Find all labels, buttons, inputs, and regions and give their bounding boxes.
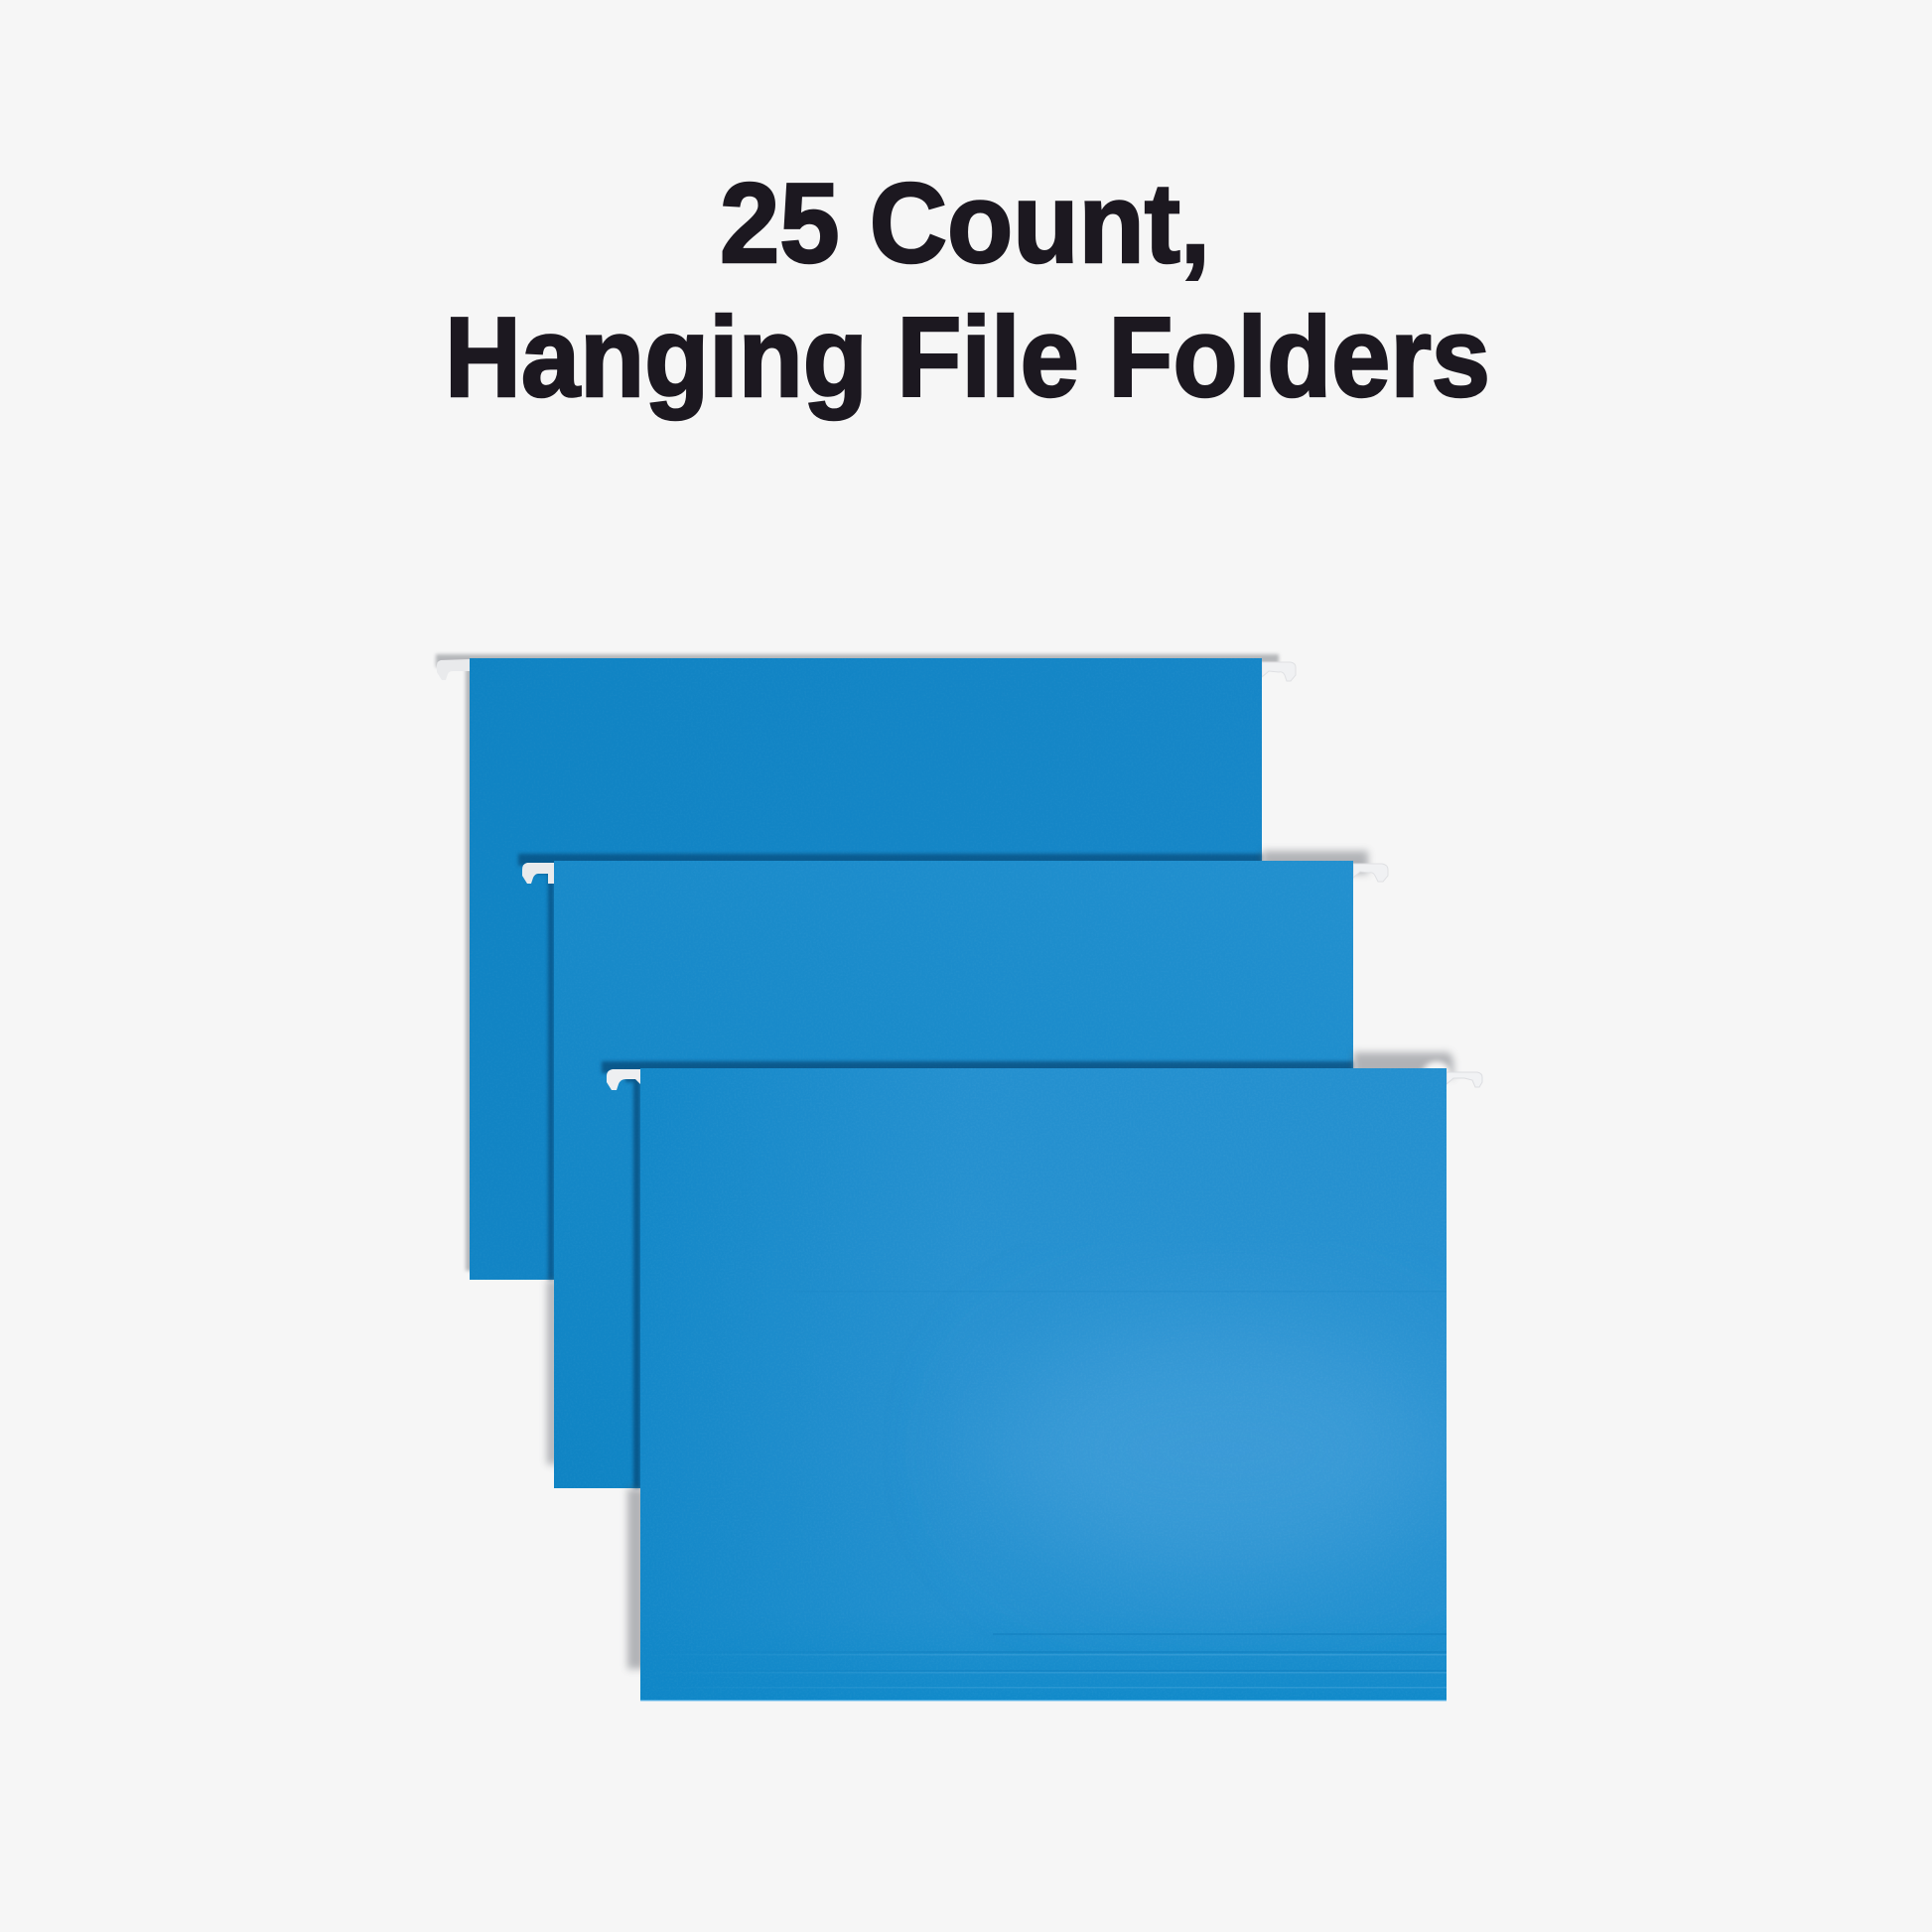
front hanging folder [602,1052,1482,1702]
title: Hanging File Folders [445,295,1490,421]
fold crease [794,1291,1447,1293]
back hanging folder [436,654,1296,1280]
folder stack illustration [436,654,1482,1702]
title: 25 Count, [720,161,1210,287]
shadow on background [547,851,1368,1464]
shadow on middle folder [602,1061,1353,1488]
shadow on background [627,1052,1453,1669]
shadow on back folder [518,854,1262,1280]
bottom score lines [640,1633,1447,1702]
middle hanging folder [518,851,1388,1488]
title [445,161,1490,421]
